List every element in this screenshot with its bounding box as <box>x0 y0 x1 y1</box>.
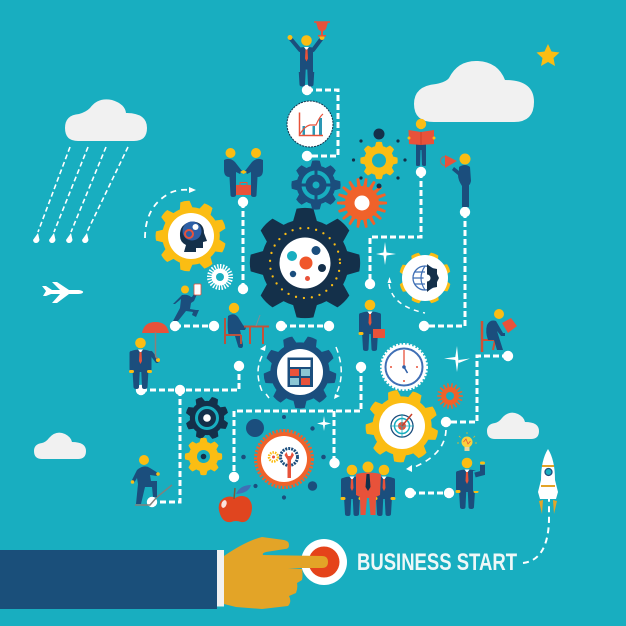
person: handshake <box>224 148 263 197</box>
person: sitting with book <box>482 309 517 352</box>
person: man with briefcase <box>358 300 385 351</box>
arrow: dashed curve from label to rocket <box>523 496 549 563</box>
icon: growth chart <box>287 101 333 147</box>
gear: yellow with dots <box>352 128 407 188</box>
icon: small sparkle below center <box>317 416 331 431</box>
person: reading book <box>408 119 436 166</box>
dashed connector paths <box>141 90 508 502</box>
person: working at desk <box>225 303 269 348</box>
gear: small orange <box>437 383 463 409</box>
arrow: arc below globe gear <box>388 277 425 313</box>
gear: orange ring with wrench <box>256 430 312 488</box>
person: man with umbrella <box>129 322 169 389</box>
icon: white sparkle right of center <box>376 242 396 265</box>
hand pressing button <box>224 537 328 609</box>
start button <box>301 539 347 585</box>
people: team of three <box>340 462 396 516</box>
cloud: lower left <box>34 433 86 459</box>
icon: white sparkle <box>444 346 470 372</box>
person: megaphone <box>440 154 471 207</box>
gear: central dark <box>250 208 360 318</box>
cuff <box>217 550 224 606</box>
icon: airplane <box>42 282 83 303</box>
gear: target <box>357 381 447 471</box>
person: stepping up <box>131 455 172 505</box>
person: raising hand <box>456 458 485 509</box>
gear: orange spiky <box>337 178 387 228</box>
cloud: top left with rain <box>33 99 147 243</box>
gear: navy top <box>291 160 341 210</box>
gear: yellow lower-left <box>185 438 222 475</box>
gear: calculator <box>257 329 342 415</box>
arrow: curve from target gear <box>406 430 446 472</box>
arrow: arc around head gear <box>145 187 196 238</box>
person: trophy winner <box>288 22 330 86</box>
star <box>536 44 560 66</box>
gear: yellow head <box>145 190 237 282</box>
arrows: dashed ring around calculator gear <box>258 345 341 399</box>
sleeve <box>0 550 217 609</box>
connector nodes <box>136 85 513 507</box>
cloud: lower right <box>487 413 539 439</box>
decorative dots around ring gear <box>241 415 326 500</box>
gear: small white spiky <box>210 267 230 287</box>
label: business start: BUSINESS START <box>357 549 517 576</box>
gear: dark lower-left <box>179 390 235 446</box>
icon: apple <box>219 485 252 522</box>
icon: clock <box>382 344 426 390</box>
person: runner with clipboard <box>173 284 201 321</box>
icon: lightbulb <box>457 432 477 451</box>
gear: globe <box>391 244 459 312</box>
cloud: top right <box>414 61 534 122</box>
icon: rocket <box>538 449 558 514</box>
